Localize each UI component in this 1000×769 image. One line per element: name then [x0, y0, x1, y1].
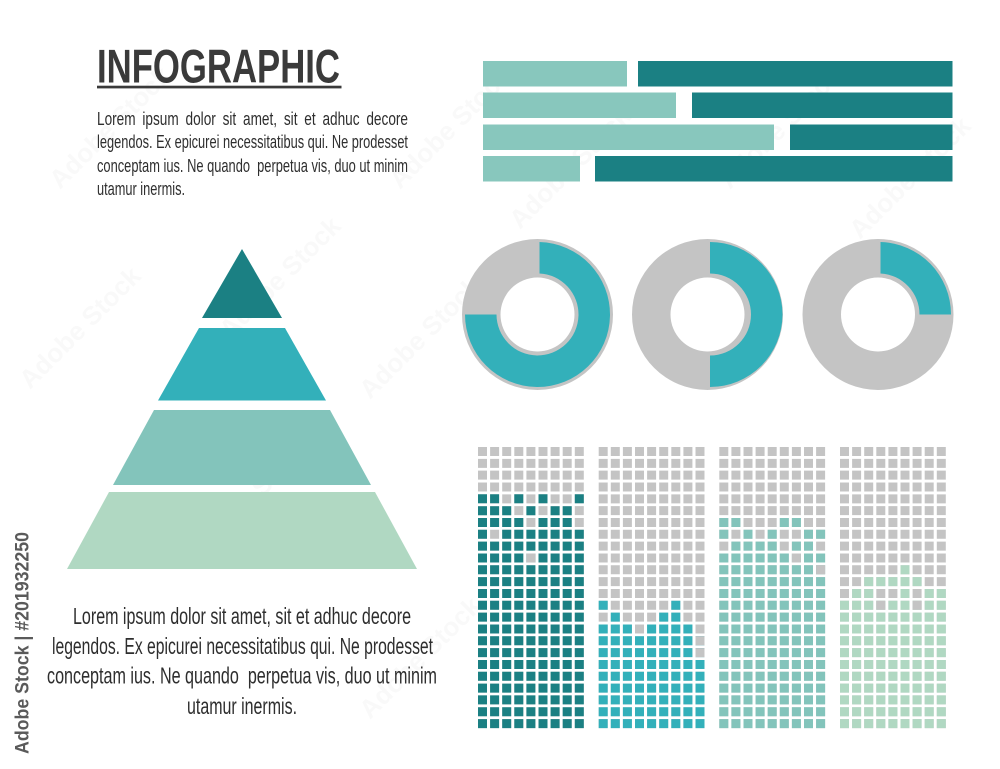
text block: pyramid caption: Lorem ipsum dolor sit amet, sit et adhuc decore: [73, 603, 411, 629]
text: Adobe Stock: [353, 270, 487, 404]
text block: intro: utamur inermis.: [97, 179, 185, 199]
dot matrix chart: soft teal: [719, 452, 825, 724]
pyramid chart: [67, 249, 417, 569]
text: Adobe Stock: [43, 60, 177, 194]
text block: intro: [97, 109, 408, 199]
text: Adobe Stock: [353, 590, 487, 724]
text block: pyramid caption: conceptam ius. Ne quando perpetua vis, duo ut minim: [47, 662, 437, 688]
text: Adobe Stock: [213, 210, 347, 344]
bar chart: stacked horizontal bars: [483, 61, 952, 182]
dot matrix chart: dark teal: [478, 452, 584, 724]
text: Adobe Stock: [383, 60, 517, 194]
text block: pyramid caption: legendos. Ex epicurei necessitatibus qui. Ne prodesset: [52, 633, 433, 659]
text: Adobe Stock: [13, 260, 147, 394]
text block: intro: legendos. Ex epicurei necessitatibus qui. Ne prodesset: [97, 132, 408, 152]
text block: intro: conceptam ius. Ne quando perpetua vis, duo ut minim: [97, 156, 408, 176]
text: Adobe Stock: [713, 60, 847, 194]
title: INFOGRAPHIC: [97, 40, 340, 92]
dot matrix chart: pale green: [840, 452, 946, 724]
text: Adobe Stock: [183, 430, 317, 564]
donut chart: 25 percent: [802, 239, 954, 390]
dot matrix chart: bright teal: [599, 452, 704, 724]
donut chart: 75 percent: [462, 239, 613, 390]
donut chart: 50 percent: [632, 239, 783, 390]
stock credit text: Adobe Stock | #201932250: [12, 532, 34, 754]
text block: pyramid caption: [47, 603, 437, 719]
text block: intro: Lorem ipsum dolor sit amet, sit et adhuc decore: [97, 109, 408, 129]
text: Adobe Stock: [503, 100, 637, 234]
text block: pyramid caption: utamur inermis.: [187, 693, 297, 719]
text: Adobe Stock: [843, 110, 977, 244]
